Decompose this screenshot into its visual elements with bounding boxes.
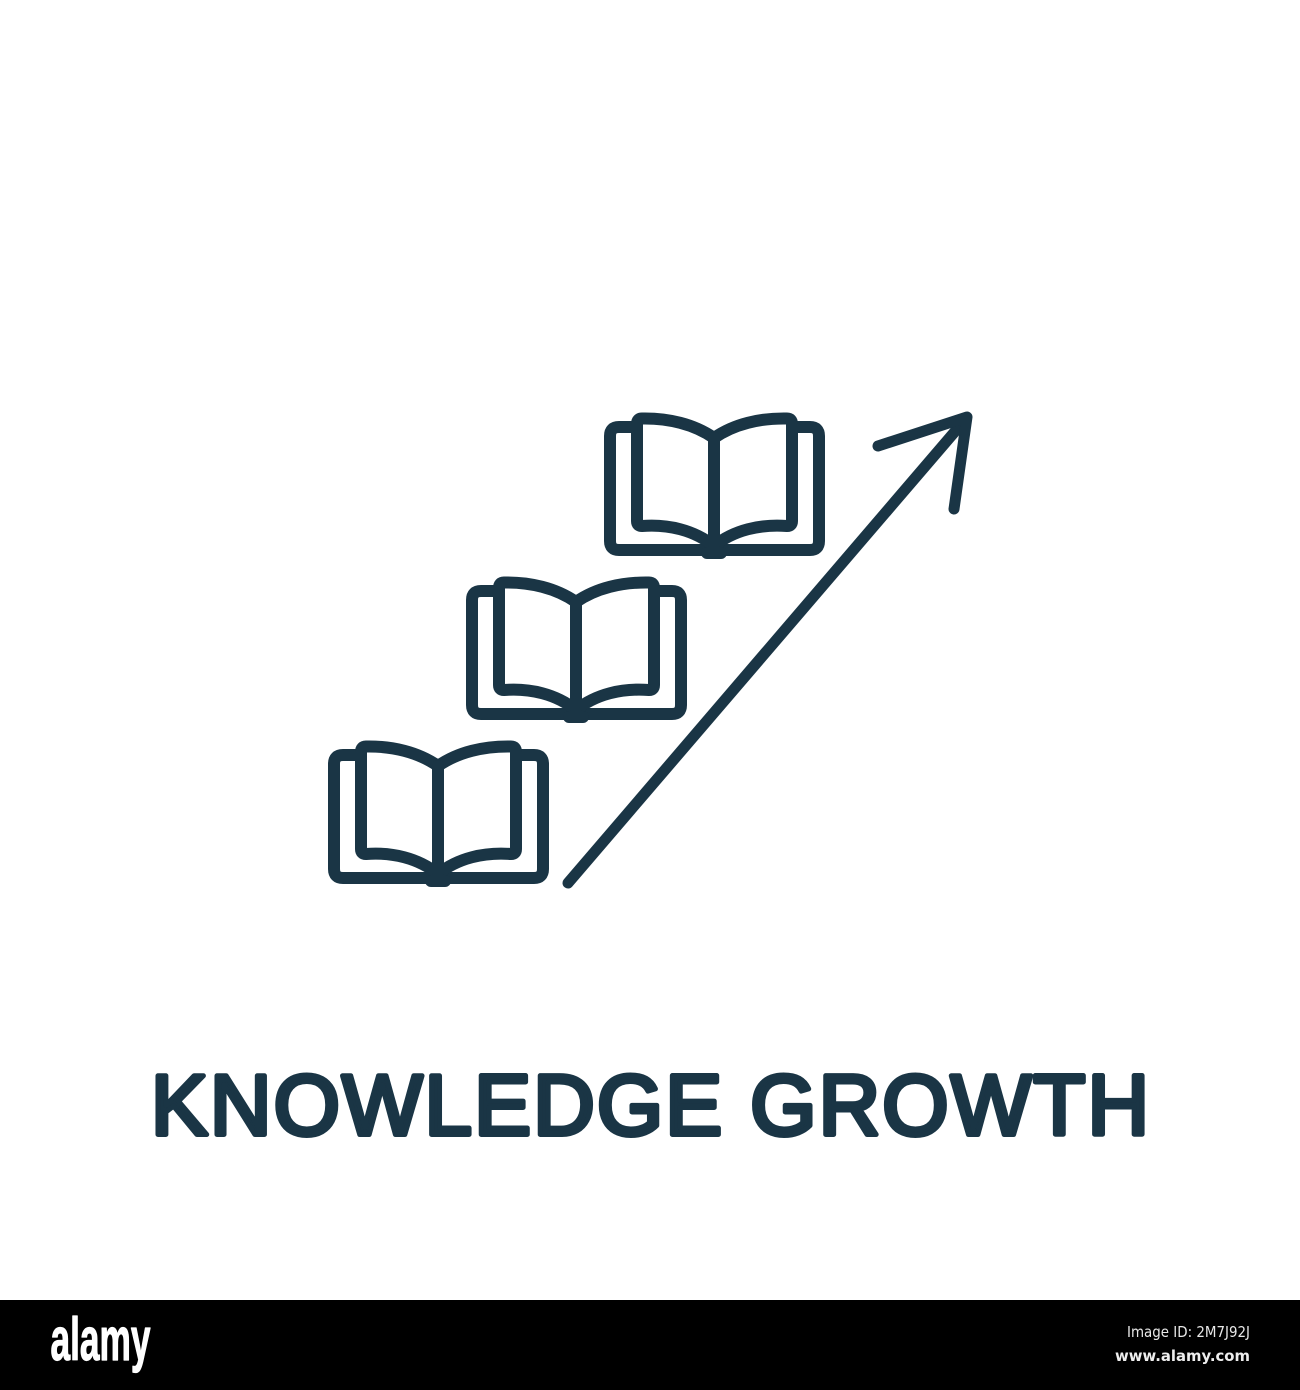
footer bar (0, 1300, 1300, 1390)
icon: top open book (610, 418, 819, 553)
logo: alamy: alamy (50, 1306, 151, 1373)
icon: knowledge growth books and arrow (334, 417, 967, 883)
image id: Image ID: 2M7J92J (1127, 1323, 1250, 1341)
website: www.alamy.com (1115, 1347, 1250, 1365)
icon: bottom open book (334, 746, 543, 881)
icon: middle open book (472, 582, 681, 717)
arrow: upward growth (568, 417, 967, 883)
title: KNOWLEDGE GROWTH (151, 1058, 1149, 1154)
